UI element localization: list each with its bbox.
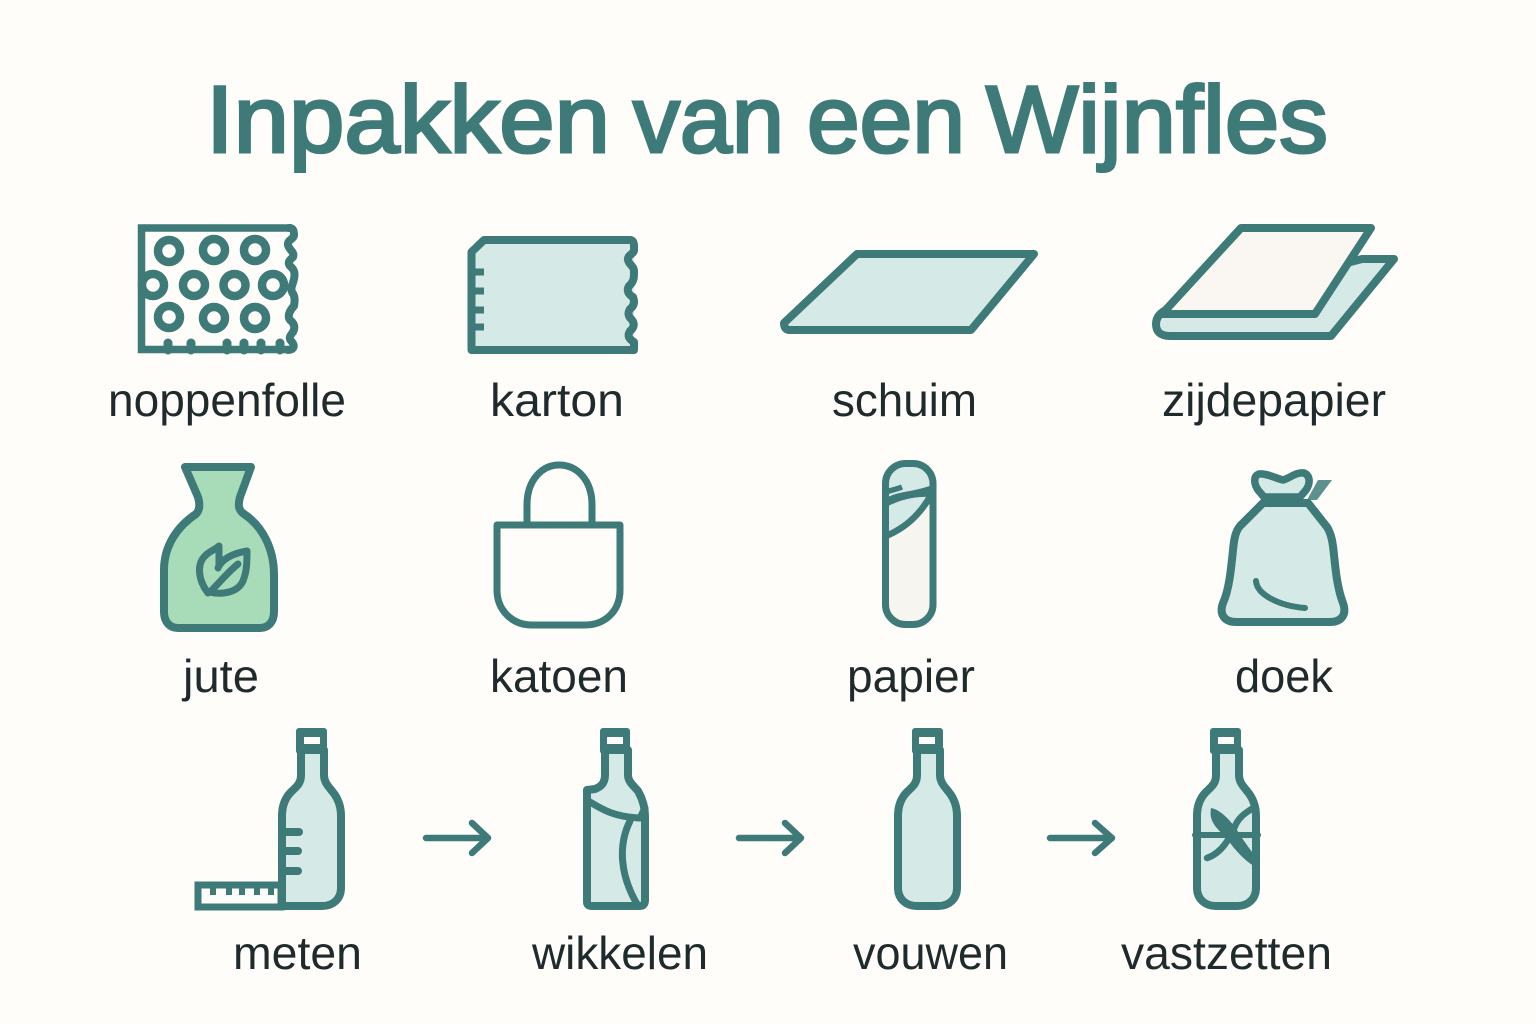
icon: paper roll	[880, 460, 940, 624]
icon: bottle folded	[898, 728, 957, 906]
label: schuim	[832, 374, 977, 426]
item: noppenfolle	[108, 228, 346, 426]
item: papier	[847, 460, 975, 702]
label: karton	[490, 374, 624, 426]
item: doek	[1222, 473, 1344, 702]
title: Inpakken	[206, 67, 610, 173]
title: van	[633, 67, 784, 173]
item: katoen	[490, 465, 628, 702]
icon: cotton tote bag	[497, 465, 620, 625]
icon: cardboard	[472, 240, 634, 350]
item: vastzetten	[1121, 728, 1332, 979]
icon: bottle with ruler	[198, 728, 341, 907]
arrow	[1050, 823, 1112, 853]
title: een	[807, 67, 965, 173]
label: wikkelen	[531, 927, 708, 979]
title: Wijnfles	[986, 67, 1328, 173]
label: jute	[181, 650, 259, 702]
icon: cloth bundle	[1222, 473, 1344, 622]
label: doek	[1235, 650, 1334, 702]
label: zijdepapier	[1162, 374, 1386, 426]
icon: jute bag with leaf	[164, 467, 274, 628]
item: wikkelen	[531, 728, 708, 979]
item: karton	[472, 240, 634, 426]
item: jute	[164, 467, 274, 702]
label: noppenfolle	[108, 374, 346, 426]
label: meten	[233, 927, 362, 979]
item: meten	[198, 728, 362, 979]
label: papier	[847, 650, 975, 702]
item: schuim	[784, 254, 1034, 426]
item: zijdepapier	[1156, 228, 1394, 426]
icon: foam sheet	[784, 254, 1034, 330]
icon: bubble wrap	[142, 228, 295, 350]
icon: bottle being wrapped	[587, 728, 645, 906]
label: vouwen	[853, 927, 1008, 979]
label: katoen	[490, 650, 628, 702]
icon: tissue paper	[1156, 228, 1394, 336]
item: vouwen	[853, 728, 1008, 979]
label: vastzetten	[1121, 927, 1332, 979]
arrow	[426, 823, 488, 853]
icon: bottle tied with ribbon	[1195, 728, 1258, 906]
arrow	[739, 823, 801, 853]
